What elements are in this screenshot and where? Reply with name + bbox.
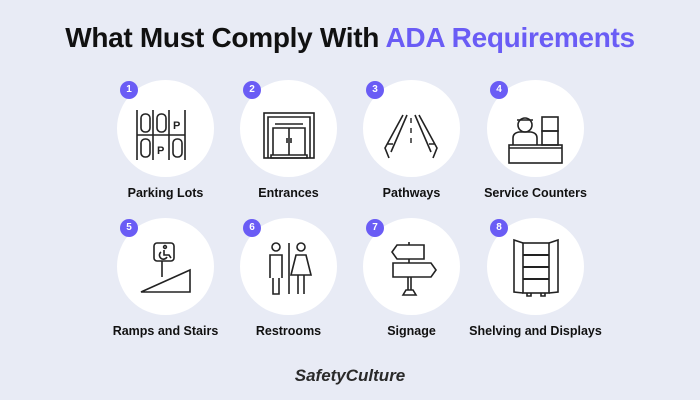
badge 5 bbox=[120, 219, 138, 237]
badge 2: 2 bbox=[249, 84, 255, 95]
badge 4 bbox=[490, 81, 508, 99]
badge 3 bbox=[366, 81, 384, 99]
icon: ramp bbox=[140, 242, 191, 293]
icon: counter bbox=[508, 116, 563, 164]
badge 3: 3 bbox=[372, 84, 378, 95]
item 3: pathways bbox=[363, 80, 460, 200]
badge 8: 8 bbox=[496, 222, 502, 233]
logo: SafetyCulture bbox=[295, 366, 405, 385]
label: Entrances bbox=[258, 186, 319, 200]
item 5: ramps bbox=[113, 218, 218, 338]
label: Parking Lots bbox=[128, 186, 203, 200]
label: Pathways bbox=[383, 186, 440, 200]
badge 1: 1 bbox=[126, 84, 132, 95]
badge 6 bbox=[243, 219, 261, 237]
label: Signage bbox=[387, 324, 436, 338]
item 4: service counters bbox=[484, 80, 587, 200]
label: Ramps and Stairs bbox=[113, 324, 218, 338]
icon: parking: P bbox=[173, 120, 180, 132]
badge 2 bbox=[243, 81, 261, 99]
badge 1 bbox=[120, 81, 138, 99]
label: Shelving and Displays bbox=[469, 324, 602, 338]
badge 7: 7 bbox=[372, 222, 378, 233]
item 7: signage bbox=[363, 218, 460, 338]
badge 7 bbox=[366, 219, 384, 237]
icon: parking: P bbox=[157, 145, 164, 157]
badge 4: 4 bbox=[496, 84, 502, 95]
icon: door bbox=[263, 112, 315, 159]
badge 5: 5 bbox=[126, 222, 132, 233]
badge 6: 6 bbox=[249, 222, 255, 233]
badge 8 bbox=[490, 219, 508, 237]
item 6: restrooms bbox=[240, 218, 337, 338]
title: What Must Comply With ADA Requirements bbox=[65, 22, 635, 53]
item 1: parking lots bbox=[117, 80, 214, 200]
icon: parking bbox=[136, 110, 186, 160]
icon: signpost bbox=[391, 242, 437, 296]
icon: shelving bbox=[513, 238, 559, 297]
item 8: shelving bbox=[469, 218, 602, 338]
icon: restroom bbox=[269, 242, 312, 295]
label: Service Counters bbox=[484, 186, 587, 200]
icon: pathway bbox=[384, 114, 438, 158]
item 2: entrances bbox=[240, 80, 337, 200]
label: Restrooms bbox=[256, 324, 321, 338]
